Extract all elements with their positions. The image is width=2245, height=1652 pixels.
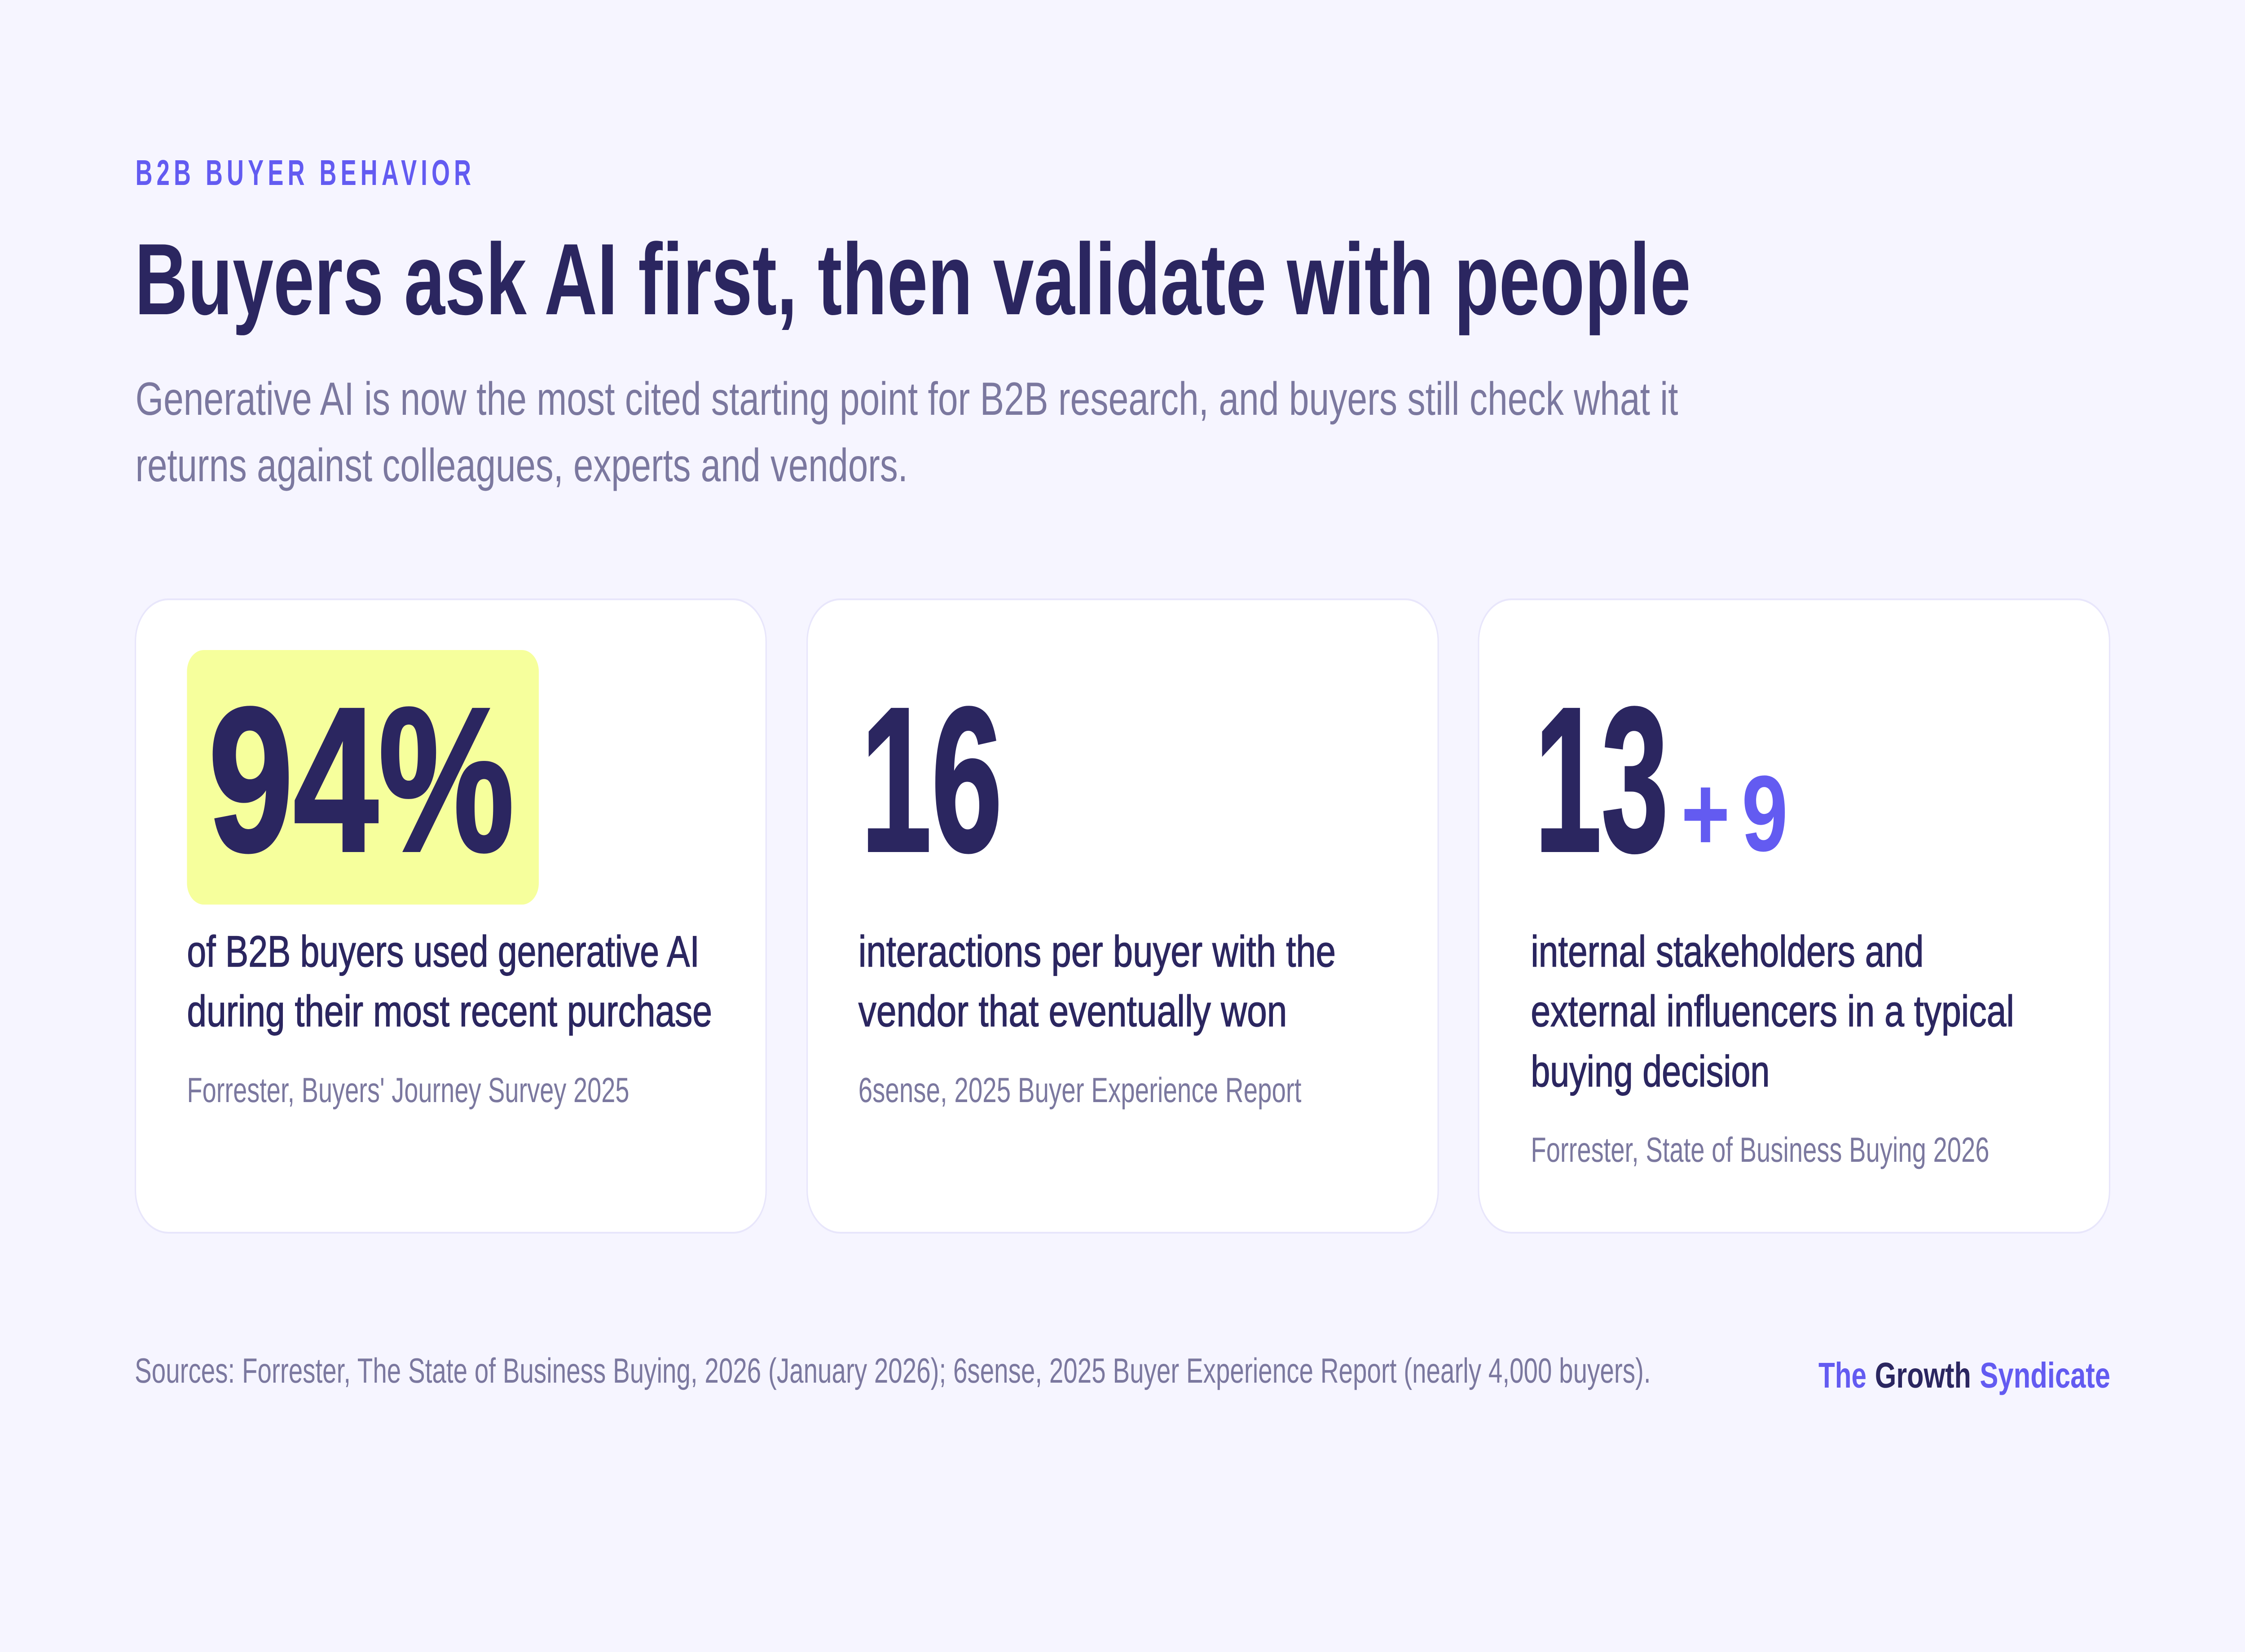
subtitle: Generative AI is now the most cited starting point for B2B research, and buyers still check what it (136, 373, 1678, 425)
stat description: interactions per buyer with the (858, 927, 1336, 976)
stat description: internal stakeholders and (1531, 927, 1924, 976)
stat number: 16: 16 (861, 665, 1002, 895)
panel: 16 interactions stat card (807, 599, 1438, 1233)
title: Buyers ask AI first, then validate with people (135, 222, 1691, 336)
stat suffix: + 9 (1681, 753, 1788, 874)
highlight box (187, 650, 539, 905)
footer sources: Sources: Forrester, The State of Business Buying, 2026 (January 2026); 6sense, 2025 Buyer Experience Report (nearly 4,000 buyers). (135, 1351, 1651, 1390)
source: 6sense, 2025 Buyer Experience Report (858, 1070, 1302, 1110)
eyebrow: B2B BUYER BEHAVIOR (136, 153, 471, 193)
brand wordmark: Growth (1875, 1355, 1971, 1395)
stat description: during their most recent purchase (187, 986, 712, 1036)
stat number: 94%: 94% (208, 665, 514, 895)
stat description (1531, 927, 2014, 1096)
panel: 94 percent stat card (136, 599, 766, 1233)
panel: 13 + 9 stat card (1479, 599, 2109, 1233)
source: Forrester, State of Business Buying 2026 (1531, 1130, 1989, 1169)
brand wordmark: The (1818, 1355, 1866, 1395)
brand wordmark (1818, 1355, 2110, 1395)
source: Forrester, Buyers' Journey Survey 2025 (187, 1070, 629, 1110)
stat suffix: + 9: + (1681, 753, 1730, 874)
stat suffix: + 9: 9 (1742, 753, 1788, 874)
subtitle (136, 373, 1678, 492)
stat description (858, 927, 1336, 1036)
stat description: vendor that eventually won (858, 986, 1287, 1036)
stat number: 13: 13 (1535, 665, 1668, 895)
stat description: buying decision (1531, 1046, 1770, 1096)
stat description: external influencers in a typical (1531, 986, 2014, 1036)
stat description (187, 927, 712, 1036)
subtitle: returns against colleagues, experts and vendors. (136, 439, 908, 492)
stat description: of B2B buyers used generative AI (187, 927, 700, 976)
brand wordmark: Syndicate (1980, 1355, 2110, 1395)
